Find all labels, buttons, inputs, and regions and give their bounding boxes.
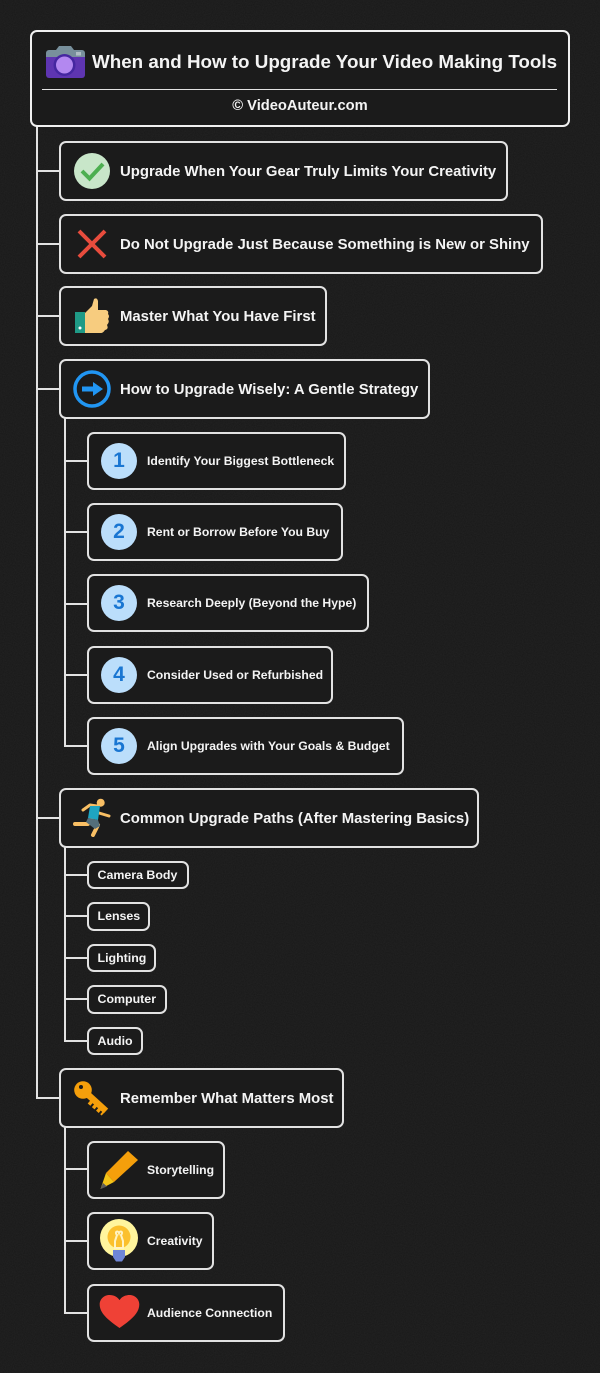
panel: common upgrade paths xyxy=(59,788,479,848)
label: Common Upgrade Paths (After Mastering Basics) xyxy=(120,811,469,827)
label: Consider Used or Refurbished xyxy=(147,668,323,682)
label: Audio xyxy=(98,1034,133,1048)
icon: thumbs up xyxy=(75,298,109,333)
icon: check xyxy=(74,153,110,189)
label: Computer xyxy=(98,992,156,1006)
label: Lenses xyxy=(98,908,140,922)
label: Camera Body xyxy=(98,868,177,882)
number badge xyxy=(101,514,137,550)
panel: how to upgrade wisely xyxy=(59,359,430,419)
icon: runner xyxy=(73,798,110,837)
panel: master xyxy=(59,286,327,346)
icon: camera xyxy=(46,46,85,78)
label: Upgrade When Your Gear Truly Limits Your Creativity xyxy=(120,164,496,180)
number badge: 1 xyxy=(113,448,125,472)
divider xyxy=(42,88,557,90)
item: lenses xyxy=(87,902,150,931)
item: audio xyxy=(87,1027,143,1055)
label: Research Deeply (Beyond the Hype) xyxy=(147,596,356,610)
icon: arrow circle xyxy=(73,370,111,408)
number badge: 5 xyxy=(113,734,125,756)
item: lighting xyxy=(87,944,156,972)
label: Remember What Matters Most xyxy=(120,1091,333,1107)
step 1 xyxy=(87,432,346,490)
number badge: 3 xyxy=(113,590,125,614)
panel: remember what matters xyxy=(59,1068,344,1128)
label: Lighting xyxy=(98,950,146,964)
step 3 xyxy=(87,574,369,632)
label: Identify Your Biggest Bottleneck xyxy=(147,454,334,468)
icon: light bulb xyxy=(100,1219,138,1262)
number badge xyxy=(101,442,137,478)
icon: key xyxy=(74,1081,108,1116)
number badge: 4 xyxy=(113,662,125,686)
label: Audience Connection xyxy=(147,1306,272,1320)
icon: pencil xyxy=(100,1151,138,1189)
label: Do Not Upgrade Just Because Something is New or Shiny xyxy=(120,237,530,253)
item: camera body xyxy=(87,861,189,889)
number badge: 2 xyxy=(113,520,125,542)
copyright: © VideoAuteur.com xyxy=(232,98,368,114)
panel: upgrade when limited xyxy=(59,141,508,201)
step 2 xyxy=(87,503,343,561)
panel: do not upgrade xyxy=(59,214,543,274)
item: creativity xyxy=(87,1212,214,1270)
item: computer xyxy=(87,985,167,1014)
label: Align Upgrades with Your Goals & Budget xyxy=(147,738,390,752)
label: Master What You Have First xyxy=(120,309,316,325)
label: Rent or Borrow Before You Buy xyxy=(147,524,329,538)
panel: header xyxy=(30,30,570,127)
item: storytelling xyxy=(87,1141,225,1199)
title: When and How to Upgrade Your Video Making Tools xyxy=(92,51,557,72)
number badge xyxy=(101,728,137,764)
icon: cross xyxy=(78,230,106,258)
number badge xyxy=(101,584,137,620)
label: Storytelling xyxy=(147,1162,214,1176)
label: Creativity xyxy=(147,1234,203,1248)
icon: heart xyxy=(100,1295,140,1328)
step 4 xyxy=(87,646,333,704)
number badge xyxy=(101,656,137,692)
label: How to Upgrade Wisely: A Gentle Strategy xyxy=(120,382,418,398)
item: audience connection xyxy=(87,1284,285,1342)
step 5 xyxy=(87,717,404,775)
